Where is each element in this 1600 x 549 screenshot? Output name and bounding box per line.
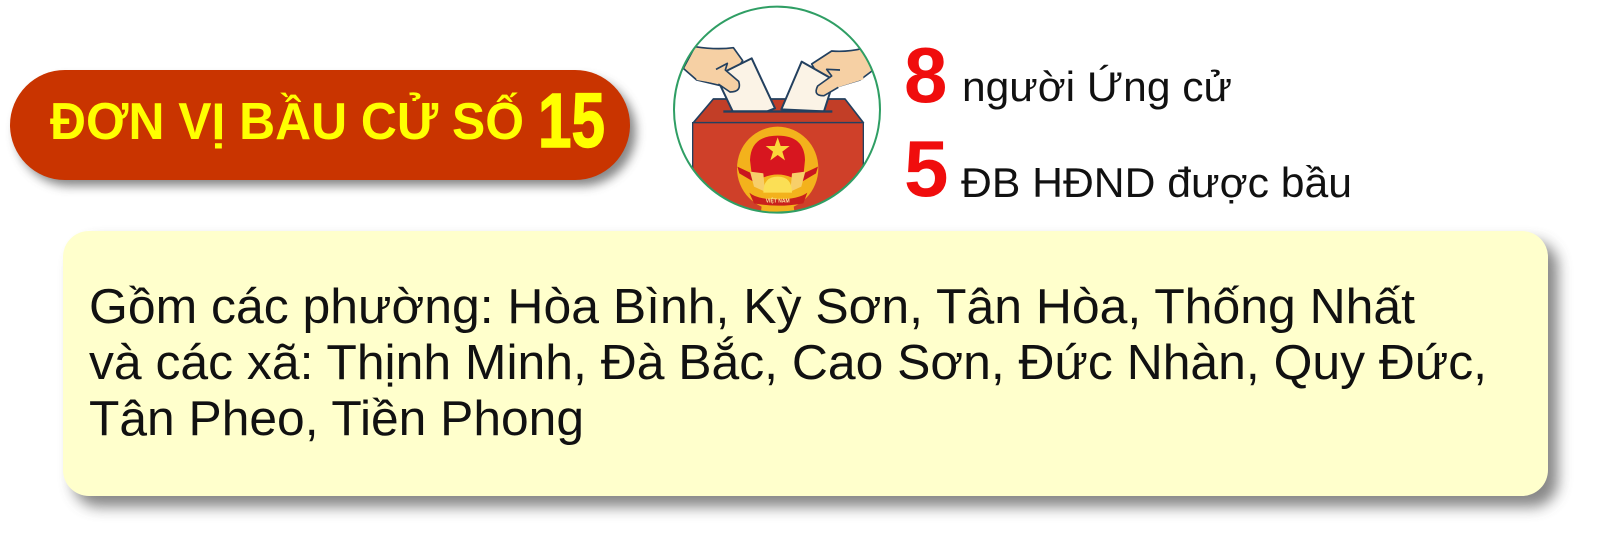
panel text: Tân Pheo, Tiền Phong [89,392,584,446]
right ballot [781,62,834,111]
left hand [683,47,743,87]
left ballot [719,58,775,111]
box lid [693,99,863,123]
number 5: 5 [904,124,948,213]
right finger [817,76,864,95]
number 8: 8 [904,31,947,119]
banner heading text: ĐƠN VỊ BẦU CỬ SỐ [50,92,524,151]
box front [692,122,864,210]
emblem: VIỆT NAM [766,197,790,205]
panel text: và các xã: Thịnh Minh, Đà Bắc, Cao Sơn, Đức Nhàn, Quy Đức, [89,336,1487,390]
delegates label: ĐB HĐND được bầu [961,159,1352,206]
banner number: 15 [538,78,605,164]
emblem [737,127,818,220]
panel text: Gồm các phường: Hòa Bình, Kỳ Sơn, Tân Hòa, Thống Nhất [89,280,1415,334]
icon: ballot box in circle [673,6,881,214]
right hand [812,48,873,90]
candidates label: người Ứng cử [962,63,1232,110]
panel text [89,280,1487,446]
stat: elected delegates [904,124,1352,213]
banner: electoral unit number [10,70,636,186]
panel: wards and communes [63,231,1558,507]
ballot slot [723,110,832,113]
left finger [696,70,738,92]
stat: candidates [904,31,1232,119]
